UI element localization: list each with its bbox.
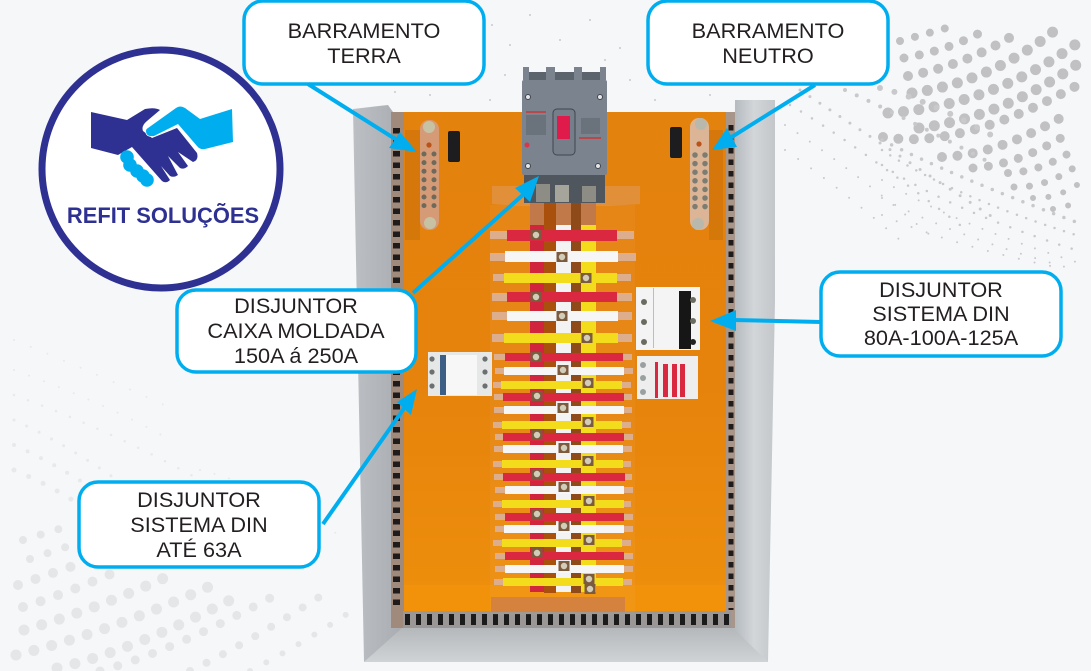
arrow: barramento terra — [308, 84, 417, 152]
vertical phase bars — [530, 203, 596, 593]
din breaker 80A to 125A — [636, 287, 700, 350]
callout: disjuntor caixa moldada: 150A á 250A — [234, 343, 359, 368]
logo text: REFIT SOLUÇÕES — [67, 203, 259, 228]
arrow: disjuntor sistema din 63A — [323, 389, 417, 524]
callout: disjuntor sistema din 80A — [821, 272, 1061, 356]
icon: handshake — [91, 106, 233, 187]
callout: barramento neutro — [648, 1, 888, 84]
left slotted strip — [391, 112, 404, 628]
busbar shadows — [405, 130, 723, 240]
din breaker up to 63A — [428, 352, 492, 396]
callout: disjuntor sistema din 80A: SISTEMA DIN — [872, 301, 1010, 326]
bottom plate bracket — [491, 597, 625, 612]
callout: barramento terra: TERRA — [327, 43, 401, 68]
orange back plate — [398, 112, 732, 612]
callout: disjuntor sistema din 80A: DISJUNTOR — [879, 277, 1003, 302]
horizontal phase bars — [490, 230, 636, 594]
transparent busbar mount plate — [490, 205, 635, 615]
right rail — [733, 100, 775, 662]
background halftone dots: upper left faint — [14, 340, 345, 540]
arrow: disjuntor caixa moldada — [413, 176, 539, 293]
moulded case breaker — [522, 67, 607, 203]
callout: barramento neutro: NEUTRO — [722, 43, 814, 68]
earth busbar — [420, 120, 439, 230]
background halftone dots: lower right sweep — [785, 88, 1076, 270]
arrow: disjuntor sistema din 80A — [710, 310, 821, 331]
neutral label tag — [670, 127, 682, 158]
callout: disjuntor caixa moldada: CAIXA MOLDADA — [207, 318, 385, 343]
background halftone dots: bottom left — [16, 529, 350, 671]
background halftone dots: top right — [883, 27, 1077, 209]
earth label tag — [448, 131, 460, 162]
bottom slotted strip — [403, 611, 731, 628]
background speckles: top centre — [394, 14, 711, 101]
bottom rail — [364, 628, 768, 662]
callout: disjuntor sistema din 63A: ATÉ 63A — [156, 537, 242, 562]
callout: barramento terra: BARRAMENTO — [288, 18, 440, 43]
callout: disjuntor caixa moldada — [177, 290, 416, 372]
top plate bracket — [492, 186, 640, 206]
callout: disjuntor sistema din 63A: DISJUNTOR — [137, 487, 261, 512]
logo: Refit Soluções — [42, 50, 280, 288]
arrow: barramento neutro — [712, 85, 815, 150]
din breaker red — [637, 356, 698, 399]
callout: disjuntor sistema din 63A — [79, 482, 319, 567]
left rail — [353, 105, 402, 662]
callout: barramento terra — [244, 1, 484, 84]
neutral busbar — [690, 118, 709, 230]
right slotted strip — [726, 112, 735, 628]
callout: disjuntor caixa moldada: DISJUNTOR — [234, 293, 358, 318]
electrical panel — [353, 67, 775, 662]
callout: barramento neutro: BARRAMENTO — [692, 18, 844, 43]
callout: disjuntor sistema din 80A: 80A-100A-125A — [864, 325, 1019, 350]
callout: disjuntor sistema din 63A: SISTEMA DIN — [130, 512, 268, 537]
